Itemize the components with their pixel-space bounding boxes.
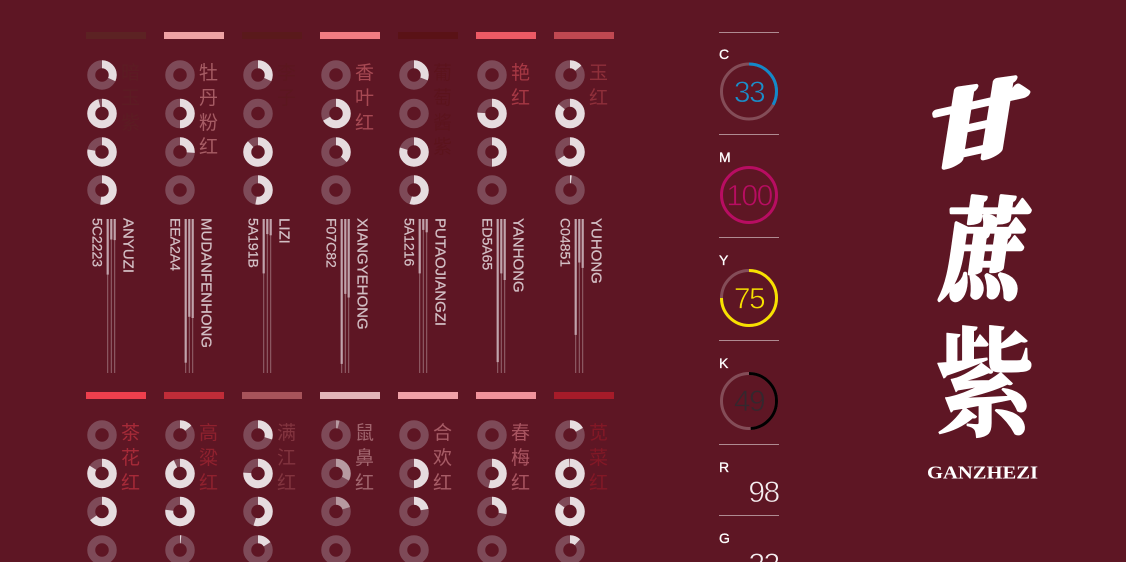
column: 满江红: [242, 392, 302, 561]
column: 玉红: 玉: [589, 63, 608, 84]
column: 鼠鼻红: [320, 392, 380, 561]
column: 苋菜红: 红: [589, 472, 608, 494]
column: 鼠鼻红: 鼻: [355, 447, 374, 469]
column: 暗玉紫: 5C2223: [89, 218, 105, 267]
column: 暗玉紫: 暗: [121, 62, 140, 84]
value: G 22: G: [719, 530, 730, 546]
column: 茶花红: 茶: [121, 422, 140, 444]
column: 茶花红: 红: [121, 472, 140, 494]
column: 春梅红: [476, 392, 536, 561]
gauge: M 100: 100: [726, 180, 773, 212]
column: 香叶红: [320, 32, 380, 373]
column: 香叶红: 叶: [355, 87, 374, 109]
column: 玉红: C04851: [557, 218, 573, 267]
column: 玉红: 红: [589, 87, 608, 109]
value: R 98: R: [719, 459, 729, 475]
title: 甘蔗紫: 蔗: [933, 165, 1044, 322]
column: 牡丹粉红: 丹: [199, 88, 218, 109]
column: 春梅红: 春: [511, 422, 530, 444]
column: 高粱红: 粱: [199, 447, 218, 469]
subtitle: GANZHEZI: GANZHEZI: [927, 462, 1038, 482]
column: 牡丹粉红: MUDANFENHONG: [197, 218, 214, 348]
column: 艳红: [476, 32, 536, 373]
column: 合欢红: 欢: [433, 447, 452, 469]
column: 春梅红: 梅: [511, 447, 530, 469]
column: 春梅红: 红: [511, 472, 530, 494]
column: 牡丹粉红: 粉: [199, 112, 218, 134]
column: 艳红: ED5A65: [479, 218, 495, 270]
gauge: K 49: K: [719, 355, 729, 371]
column: 牡丹粉红: 牡: [199, 62, 218, 84]
column: 李子: LIZI: [275, 218, 292, 244]
column: 高粱红: [164, 392, 224, 561]
column: 高粱红: 红: [199, 472, 218, 494]
gauge: Y 75: 75: [734, 282, 765, 316]
gauge: Y 75: Y: [719, 252, 729, 268]
column: 苋菜红: [554, 392, 614, 561]
column: 茶花红: 花: [121, 447, 140, 469]
column: 李子: 5A191B: [245, 218, 261, 268]
column: 满江红: 满: [277, 422, 296, 444]
column: 苋菜红: 菜: [589, 447, 608, 469]
value: G 22: [719, 530, 779, 562]
title: 甘蔗紫: [921, 49, 1044, 461]
column: 葡萄酱紫: 萄: [433, 87, 452, 109]
gauge: M 100: M: [719, 149, 731, 165]
column: 暗玉紫: 玉: [121, 88, 140, 109]
column: 葡萄酱紫: PUTAOJIANGZI: [431, 218, 448, 326]
column: 葡萄酱紫: [398, 32, 458, 373]
panel: CMYK and RGB values: [719, 32, 779, 562]
column: 鼠鼻红: 鼠: [355, 422, 374, 444]
column: 香叶红: F07C82: [323, 218, 339, 268]
gauge: K 49: [719, 355, 776, 428]
gauge: C 33: C: [719, 46, 729, 62]
column: 李子: 子: [277, 88, 296, 109]
column: 香叶红: 红: [355, 112, 374, 134]
gauge: K 49: 49: [734, 385, 765, 418]
gauge: Y 75: [719, 252, 776, 326]
column: 暗玉紫: ANYUZI: [119, 218, 136, 273]
column: 高粱红: 高: [199, 422, 218, 444]
column: 满江红: 红: [277, 472, 296, 494]
column: 李子: 李: [277, 62, 296, 84]
column: 香叶红: 香: [355, 62, 374, 84]
column: 合欢红: [398, 392, 458, 561]
column: 满江红: 江: [277, 447, 296, 469]
column: 苋菜红: 苋: [589, 422, 608, 444]
column: 葡萄酱紫: 酱: [433, 112, 452, 134]
column: 葡萄酱紫: 紫: [433, 136, 452, 158]
column: 牡丹粉红: EEA2A4: [167, 218, 183, 271]
column: 牡丹粉红: 红: [199, 136, 218, 158]
column: 牡丹粉红: [164, 32, 224, 373]
column: 玉红: YUHONG: [587, 218, 604, 284]
gauge: M 100: [719, 149, 776, 222]
column: 香叶红: XIANGYEHONG: [353, 218, 370, 330]
column: 暗玉紫: 紫: [121, 112, 140, 134]
title: 甘蔗紫: 紫: [935, 292, 1035, 461]
column: 李子: [242, 32, 302, 373]
column: 暗玉紫: [86, 32, 146, 373]
column: 艳红: YANHONG: [509, 218, 526, 293]
column: 合欢红: 红: [433, 472, 452, 494]
gauge: C 33: 33: [734, 76, 765, 109]
column: 艳红: 艳: [511, 62, 530, 84]
title: 甘蔗紫: 甘: [921, 49, 1036, 188]
gauge: C 33: [719, 46, 776, 119]
column: 葡萄酱紫: 5A1216: [401, 218, 417, 266]
column: 茶花红: [86, 392, 146, 561]
column: 鼠鼻红: 红: [355, 472, 374, 494]
value: R 98: [719, 459, 779, 509]
value: R 98: 98: [748, 476, 779, 509]
column: 艳红: 红: [511, 87, 530, 109]
column: 玉红: [554, 32, 614, 373]
column: 葡萄酱紫: 葡: [433, 62, 452, 84]
column: 合欢红: 合: [433, 422, 452, 444]
